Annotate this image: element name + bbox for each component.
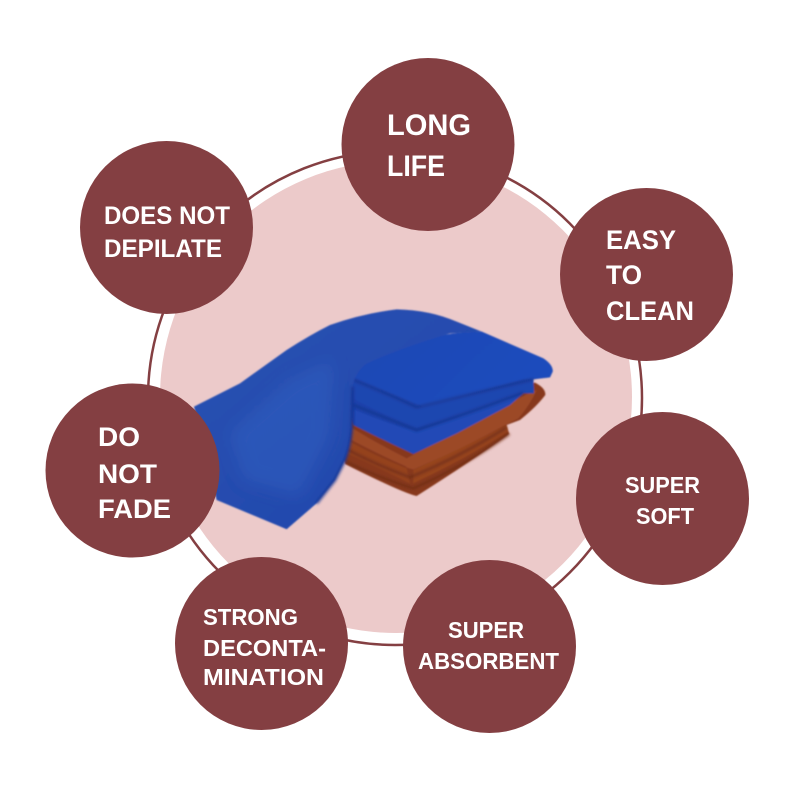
badge: strong decontamination: MINATION [203,664,324,690]
brown towels [340,383,545,496]
badge: super soft: SOFT [636,503,695,529]
badge: do not fade: NOT [98,459,158,489]
badge: does not depilate [80,141,253,314]
blue folded towels [337,332,553,454]
badge: long life: LONG [387,109,471,142]
outer ring [148,151,642,645]
badge: easy to clean: EASY [606,225,676,255]
badge: does not depilate: DEPILATE [104,235,222,263]
badge: does not depilate: DOES NOT [104,202,230,230]
badge: easy to clean: CLEAN [606,296,694,326]
badge: super absorbent [403,560,576,733]
badge: easy to clean [560,188,733,361]
badge: super absorbent: ABSORBENT [418,648,560,674]
badge: do not fade: FADE [98,494,171,524]
blue draped towel [194,309,482,529]
badge: super absorbent: SUPER [448,617,524,643]
badge: long life [342,58,514,231]
badge: long life: LIFE [387,150,445,183]
badge: do not fade: DO [98,422,140,452]
badge: super soft [576,412,749,585]
pink central disc [160,161,632,633]
badge: strong decontamination [175,557,348,730]
badge: strong decontamination: STRONG [203,604,298,630]
badge: do not fade [46,384,220,558]
badge: strong decontamination: DECONTA- [203,635,326,661]
towel stack [194,309,553,529]
badge: easy to clean: TO [606,260,642,290]
badge: super soft: SUPER [625,472,700,498]
